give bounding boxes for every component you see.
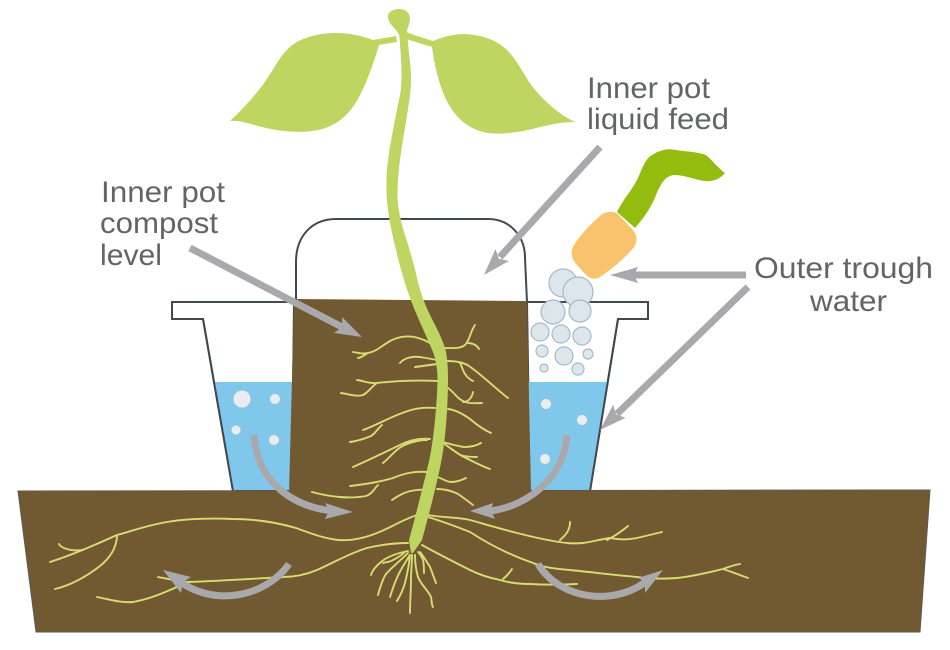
label: inner pot compost level: compost [100, 207, 219, 240]
arrow: outer trough to water [600, 287, 748, 430]
left trough section [172, 302, 294, 491]
right leaf [403, 32, 575, 134]
label: inner pot liquid feed: Inner pot [587, 72, 711, 105]
label: outer trough water [754, 252, 933, 318]
label: inner pot liquid feed: liquid feed [587, 103, 729, 136]
right trough section [527, 302, 648, 491]
watering can spout [572, 149, 725, 279]
ground soil [18, 490, 930, 632]
arrow: compost level [190, 248, 362, 337]
curved arrow: left trough water into soil [254, 435, 353, 519]
roots in inner pot [312, 325, 508, 505]
inner pot upper wall [296, 219, 527, 302]
outer trough pot [172, 302, 648, 491]
plant [230, 9, 575, 553]
label: inner pot compost level: level [100, 239, 162, 272]
taproot fine roots [371, 551, 436, 613]
inner pot compost [289, 299, 531, 494]
bubbles in trough water [231, 390, 588, 464]
left leaf [230, 33, 397, 132]
curved arrow: soil water moving left [163, 564, 289, 596]
trough wall outlines [203, 319, 618, 491]
label: inner pot liquid feed [587, 72, 729, 136]
label: outer trough water: Outer trough [754, 252, 933, 285]
label: outer trough water: water [809, 285, 887, 318]
inner pot [289, 219, 531, 494]
curved arrow: soil water moving right [538, 564, 663, 596]
spout tube [617, 149, 725, 228]
falling water droplets [531, 269, 593, 375]
stem [386, 30, 448, 553]
roots in ground soil [50, 515, 748, 613]
left trough water [214, 382, 293, 490]
spout rose [572, 212, 636, 279]
right trough water [528, 382, 607, 490]
label: inner pot compost level: Inner pot [101, 176, 226, 209]
arrow: liquid feed [484, 147, 600, 275]
label: inner pot compost level [100, 176, 226, 272]
arrow: outer trough to spout [610, 267, 746, 283]
bud [388, 9, 410, 35]
curved arrow: right trough water into soil [470, 435, 567, 519]
